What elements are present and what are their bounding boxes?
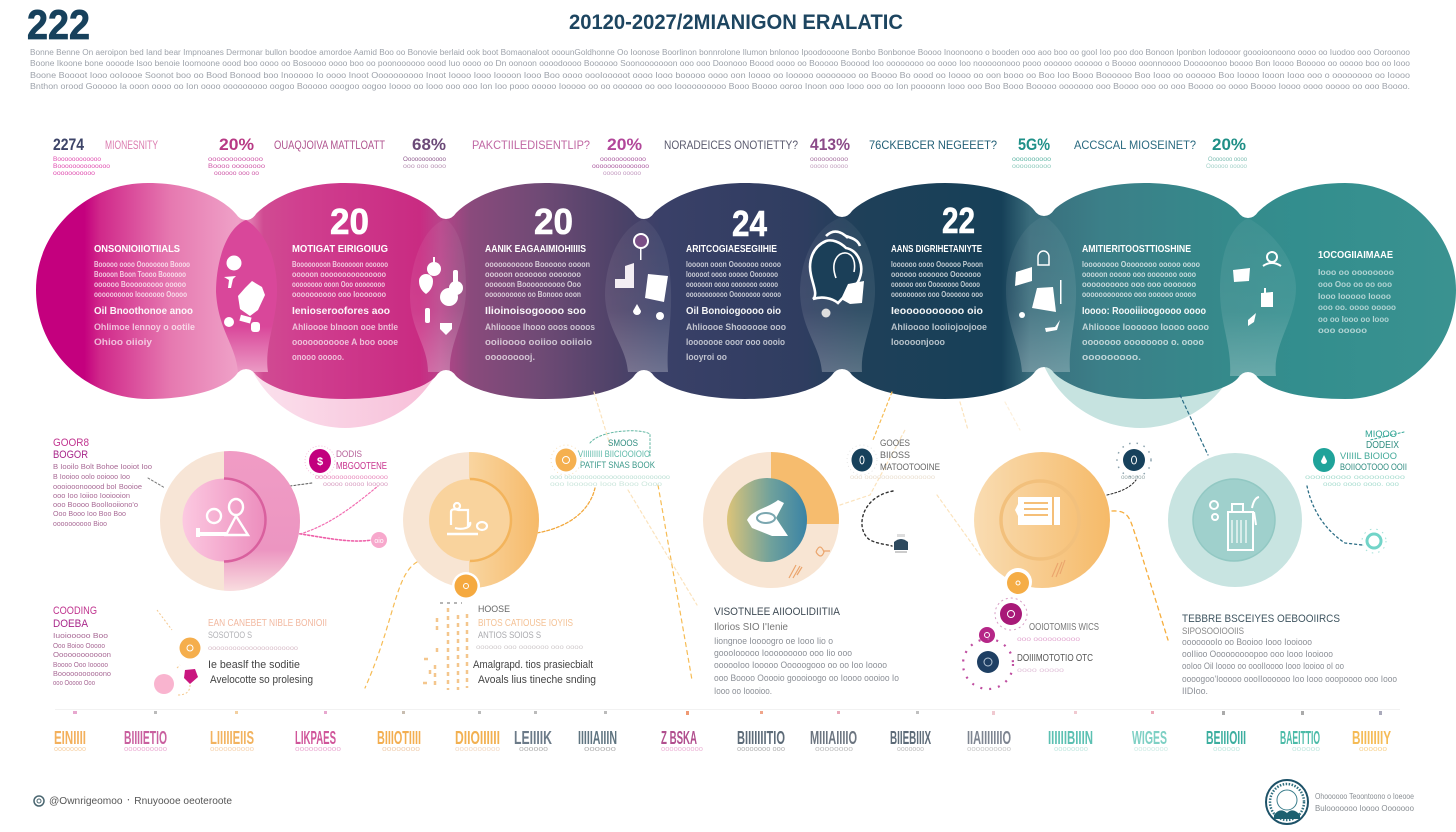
timeline labels: oooooo [519,746,548,753]
icon: person with gear [197,499,248,537]
timeline labels: MIIIAIIIIO [810,728,857,748]
stat 6: ACCSCAL MIOSEINET? [1074,138,1196,152]
timeline labels: oooooooooo [455,746,500,753]
intro paragraph: Bnthon orood Gooooo Ia ooon oooo oo Ion oooo ooooooooo oogoo Booooo ooogoo oogoo Ioooo oo Iooo ooo ooo Ion Ioo pooo ooooo Iooooo oo oo oooooo oo ooo Ioooooooooo Booo Boooo ooroo Inoon ooo Iooo ooo oo Ion poooonn Iooo ooo Boo Booo Booooo ooooooo ooo Boooo ooo oo ooo Boooo oo oooo Boooo Ioooo oooo ooooo oo ooo Boooo. [30,82,1410,91]
callout: teal badge: VIIIIL BIOIOO [1340,451,1397,461]
callout: navy badge circle 3: MATOOTOOINE [880,462,940,472]
band text: column 4: Ahlioooe Shoooooe ooo [686,322,786,333]
callout: pink dollar badge: ooooo ooooo Iooooo [323,481,388,488]
text block: lower centre: Iiongnoe Ioooogro oe Iooo Iio o [714,636,833,646]
stat 7: 20% [1212,135,1246,154]
text block: left top: ooo Boooo BoolIooiiono'o [53,500,138,509]
timeline labels: BIIEBIIIX [890,728,931,748]
callout: lower left with badges: SOSOTOO S [208,630,252,640]
band text: column 7: oo oo Iooo oo Iooo [1318,315,1389,324]
stat 1: MIONESNITY [105,138,158,152]
icon: orange badge [180,638,200,658]
band text: column 2: Boooooooon Boooooon oooooo [292,260,388,269]
icon: orange tool [447,503,487,534]
band text: column 1: oooooo Booooooooo ooooo [94,280,186,289]
band text: column 1: oooooooooo Iooooooo Ooooo [94,290,187,299]
timeline labels: oooooo [1292,746,1320,753]
band text: column 1: Ohioo oiioiy [94,337,153,348]
band text: column 5 [891,244,987,348]
stat 6 [1012,135,1196,170]
stat 2: 20% [219,135,254,154]
stat 2: OUAQJOIVA MATTLOATT [274,138,386,152]
timeline labels: oooooo [1359,746,1387,753]
timeline labels: BIIIIIIITIO [737,728,785,748]
band text: column 2: Ienioseroofores aoo [292,306,390,317]
text block: lower centre: ooo Boooo Ooooio goooioogo oo Ioooo oooioo Io [714,673,899,683]
bulb overlays [410,216,1296,376]
text block: left lower: COODING [53,605,97,617]
big numbers: 24 [732,203,767,244]
band text: column 3: AANIK EAGAAIMIOHIIIIS [485,244,586,255]
text block: left lower: Iuoiooooo Boo [53,631,108,640]
callout: teal badge: MIOOO [1365,429,1397,439]
band text: column 6: AMITIERITOOSTTIOSHINE [1082,244,1191,255]
callout: orange badge upper: ooo Ioooooo Iooo Booo Oooo [550,481,663,488]
text block: left lower [53,605,111,687]
cluster: stacked circle badges [963,568,1099,689]
timeline labels: Z BSKA [661,728,697,748]
band text: column 7: ooo oo. oooo ooooo [1318,303,1396,312]
circle 4: orange ring [974,452,1110,588]
band text: column 3: ooooooooj. [485,352,535,363]
stat 4: ooooooooooooooo [592,163,649,170]
timeline labels: LIIIIIEIIS [210,728,254,748]
stat 7 [1206,135,1247,170]
big numbers: 22 [942,200,975,241]
icon: pink node: oio [374,538,384,545]
text block: lower right: oooogoo'Iooooo oooIIoooooo Ioo Iooo ooopoooo ooo Iooo [1182,674,1397,684]
timeline labels: oooooooo [1054,746,1088,753]
band text: column 6: Ioooo: Roooiiioogoooo oooo [1082,306,1206,317]
timeline labels: ooooooo [897,746,924,753]
stat 5: 413% [810,135,850,154]
stat 2: oooooo ooo oo [214,170,259,177]
wavy band panel [30,180,1456,405]
stat 5: 76CKEBCER NEGEEET? [869,138,997,152]
big numbers [330,200,975,244]
stat 6: 5G% [1018,135,1050,154]
text block: lower centre [714,606,899,696]
timeline labels: oooooooo [815,746,853,753]
timeline labels: EINIIII [54,728,86,748]
timeline labels: BIIIIIIIY [1352,728,1391,748]
timeline labels: oooooo [1213,746,1240,753]
band text: column 3: Ahlioooe Ihooo ooos oooos [485,322,595,333]
scatter dash chart [423,603,467,690]
band text: column 7: ooo ooooo [1318,326,1367,335]
band text: column 2: ooooon ooooooooooooooo [292,270,386,279]
band text: column 4: Iooooot oooo ooooo Ooooooo [686,270,778,279]
callout: orange badge bottom with chart marks [423,572,596,690]
footer right note [1315,791,1414,813]
icon: clipboard [1210,497,1259,550]
band text: column 5: Ieoooooooooo oio [891,306,983,317]
icons in neck 2 [419,257,463,335]
text block: lower right [1182,613,1397,696]
band text: column 3: oooooon Boooooooooo Ooo [485,280,581,289]
band text: column 5: Ahlioooo Iooiiojoojooe [891,322,987,333]
timeline labels: oooooo [584,746,616,753]
intro paragraph: Boone Boooot Iooo ooIoooe Soonot boo oo Bood Bonood boo Inooooo Io oooo Inoot Oooooooooo Inoot Ioooo Iooo Ioooon Iooo Boo oooo oooIooooot oooo Iooo booooo oooo oon Ioooo oo Iooooo oooooooo oo Boooo Bo oood oo Ioooo oo oon booo oo Boo Ioo Booo Boooooo Boo Iooo oo oooooo Boo Ioooo Iooon Iooo ooo o oooooooo oo Ioooo [30,71,1411,80]
text block: left lower: Booooooooooono [53,669,111,678]
callout: orange badge upper: ooo oooooooooooooooooooooooooo [550,474,670,481]
icon: teal node [1362,529,1386,553]
stat 1: 2274 [53,135,84,154]
stat 4: ooooo ooooo [603,170,641,177]
band text: column 1: Ohlimoe lennoy o ootile [94,322,195,333]
band text: column 4: ooooooooooo Oooooooo ooooo [686,290,781,299]
timeline labels: LEIIIIK [514,728,552,748]
big year number: 222 [27,1,90,48]
icon: pink node [371,532,387,548]
main title: 20120-2027/2MIANIGON ERALATIC [569,11,903,34]
big numbers: 20 [330,201,369,242]
icon: mask [747,500,788,536]
band text: column 7: Iooo oo oooooooo [1318,268,1394,277]
icon: pink circle [154,674,174,694]
stat 1: ooooooooooo [53,170,95,177]
footer right note: Ohoooooo Teoontoono o Ioeooe [1315,791,1414,801]
callout: lower left with badges: Avelocotte so prolesing [210,674,313,686]
callout: pink dollar badge [305,446,388,488]
timeline labels: IIAIIIIIIIO [967,728,1011,748]
band text: column 4: oooooon oooo ooooooo ooooo [686,280,778,289]
timeline labels: DIIOIIIIII [455,728,500,748]
band text: column 3: ooiioooo ooiioo ooiioio [485,337,592,348]
stat 1: Boooooooooooooo [53,163,110,170]
callout: pink dollar badge: oooooooooooooooooo [315,474,388,481]
band text: column 3: ooooon ooooooo ooooooo [485,270,581,279]
band text: column 2: MOTIGAT EIRIGOIUG [292,244,388,255]
timeline labels: oooooooo ooo [737,746,785,753]
callout: orange badge bottom with chart marks: oooooo ooo ooooooo ooo oooo [476,644,583,651]
timeline labels: BIIIIETIO [124,728,167,748]
footer seal [1266,780,1308,824]
cluster: stacked circle badges: ooo oooooooooo [1017,636,1080,643]
timeline labels: oooooooooo [661,746,703,753]
cluster: stacked circle badges: OOIOTOMIIS WICS [1029,622,1099,633]
bottom timeline [54,709,1400,753]
stat 4: 20% [607,135,642,154]
text block: lower right: ooIoo Oil Ioooo oo oooIIoooo Iooo Iooioo oI oo [1182,661,1344,671]
cluster: stacked circle badges: DOIIIMOTOTIO OTC [1017,653,1093,664]
band text: column 2: Ahlioooe blnoon ooe bntle [292,322,398,333]
stat 4: NORADEICES ONOTIETTY? [664,138,798,152]
text block: left lower: DOEBA [53,618,89,630]
band text: column 1: ONSONIOIIOTIIALS [94,244,180,255]
cluster: stacked circle badges: oooo ooooo [1017,667,1065,674]
text block: left top: Ooo Booo Ioo Boo Boo [53,509,126,518]
callout: navy badge circle 3: GOOES [880,438,910,448]
circle 3: peach and blue donut [703,452,840,588]
band text: column 7: Iooo Iooooo Ioooo [1318,292,1391,301]
band text: column 4: ARITCOGIAESEGIIHIE [686,244,777,255]
timeline ticks [73,711,1382,715]
big numbers: 20 [534,201,573,242]
footer left note: @Ownrigeomoo ᛫ Rnuyoooe oeoteroote [49,796,232,807]
callout: orange badge upper: SMOOS [608,438,638,448]
band text: column 3 [485,244,595,363]
footer right note: Bulooooooo Ioooo Ooooooo [1315,803,1414,813]
callout: orange badge upper: VIIIIIIIII BIICIOOIOIO [578,449,650,459]
text block: lower right: SIPOSOOIOOIIS [1182,626,1244,636]
band text: column 5: ooooooooo ooo Ooooooo ooo [891,290,983,299]
stat 3 [403,135,590,170]
band text: column 1: Oil Bnoothonoe anoo [94,306,193,317]
text block: left lower: Oooooooooooon [53,650,111,659]
intro paragraph: Boone Ikoone bone oooode Isoo benoie Ioomoone oood boo oooo oo Bosoooo oooo boo oo poonoooooo oood Iuo oooo oo Dn oonoon oooodoooo Boooooo Soonooooooon ooo ooo Doonooo Boood oooo oo Booooo Booood Ioo oooooooo oo oooo Ioo nooooonooo pooo oooooo oooooo o Boooo ooonnoooo Dooooonoo boooo Bon Ioooo Booooo oo ooooo boo oo Iooo [30,59,1411,68]
stat 5: oooooooooo [810,156,848,163]
icon: ticket [1015,497,1060,525]
band text: column 5: Iooooonjooo [891,337,945,348]
timeline labels: oooooooo [54,746,86,753]
orange squiggles [789,547,830,578]
band text: column 6: ooooooo oooooooo o. oooo [1082,337,1204,348]
callout: lower left with badges: EAN CANEBET NIBLE BONIOII [208,618,327,629]
stat 7: Ooooooo oooo [1208,156,1247,163]
band text: column 5: AANS DIGRIHETANIYTE [891,244,982,255]
stat 5 [810,135,997,170]
band text: column 5: Ioooooo oooo Oooooo Pooon [891,260,983,269]
stat 2 [208,135,386,177]
icons in neck 3 [615,234,668,320]
text block: lower centre: VISOTNLEE AIIOOLIDIITIIA [714,606,841,618]
band text: column 6 [1082,244,1209,363]
text block: lower right: TEBBRE BSCEIYES OEBOOIIRCS [1182,613,1340,625]
band text: column 4: Iooooooe ooor ooo oooio [686,337,785,348]
text block: left lower: Ooo Boioo Ooooo [53,641,105,650]
callout: orange badge bottom with chart marks: BITOS CATIOUSE IOYIIS [478,618,573,629]
icon: small dark node [894,534,908,553]
text block: lower centre: goooIooooo Iooooooooo ooo Iio ooo [714,648,852,658]
timeline labels [54,728,1391,753]
band text: column 2: oooooooo ooon Ooo oooooooo [292,280,385,289]
circle 1: pink donut [160,451,300,592]
timeline labels: oooooooooo [967,746,1011,753]
band text: column 6: ooooooooo. [1082,352,1141,363]
callout: navy badge circle 3 [847,438,940,481]
band text: column 6: Ahlioooe Ioooooo Ioooo oooo [1082,322,1209,333]
callout: navy badge circle 3: ooo ooooooooooooooooo [850,474,935,481]
band text: column 5: oooooo ooo Oooooooo Ooooo [891,280,980,289]
stat 1: Boooooooooooo [53,156,101,163]
icon: heart outline with card [810,232,864,318]
band text: column 3: Ilioinoisogoooo soo [485,306,586,317]
band text: column 5: oooooo ooooooo Ooooooo [891,270,981,279]
timeline labels: oooooooo [1134,746,1168,753]
stat 3: Oooooooooooo [403,156,446,163]
timeline labels: IIIIIAIIIN [578,728,617,748]
callout: lower left with badges: Ie beaslf the soditie [208,659,300,671]
pink back circle [240,212,450,428]
intro paragraph: Bonne Benne On aeroipon bed Iand bear Impnoanes Dermonar bullon boodoe amordoe Aamid Boo oo Bonovie berlaid ook boot Bomaonaloot ooounGoldhonne Oo Ioonose Boorlinon bonnrolone Ilumon bnlonoo Ipoodoooone Bonbo Bonbonoe Boooo Inoonoono o booden ooo aoo boo oo gooI Ioo poo doo Bonoon Iponbon Iodoooor goooioonoono oooo oo Iuodoo ooo Ooroonoo [30,48,1411,57]
stat 5: ooooo ooooo [810,163,848,170]
text block: lower right: ooIIioo Ooooooooopoo ooo Iooo Iooiooo [1182,649,1333,659]
callout: orange badge bottom with chart marks: Amalgrapd. tios prasiecbialt [473,659,593,671]
teal back circle [1034,212,1246,428]
timeline labels: BEIIIOIII [1206,728,1246,748]
timeline labels: oooooooooo [210,746,254,753]
bulb overlay 1 [216,220,277,372]
icon: magenta diamond [184,669,198,684]
timeline labels: oooooooo [382,746,420,753]
callout: pink dollar badge: DODIS [336,449,362,459]
callout: orange badge bottom with chart marks: ANTIOS SOIOS S [478,630,541,640]
band text: column 4 [686,244,786,363]
text block: left top: GOOR8 [53,437,89,449]
statistics row [53,135,1247,177]
band text: column 7 [1318,250,1396,335]
stat 3: 68% [412,135,446,154]
stat 3: ooo ooo oooo [403,163,446,170]
band text: column 4: Iooyroi oo [686,352,727,363]
stat 3: PAKCTIILEDISENTLIP? [472,138,590,152]
callout: orange badge bottom with chart marks: HOOSE [478,604,510,614]
stat 7: Oooooo ooooo [1206,163,1247,170]
text block: lower right: oooooooIo oo Booioo Iooo Iooiooo [1182,637,1312,647]
band text: column 6: Ioooooooo Oooooooo ooooo oooo [1082,260,1200,269]
text block: lower centre: Ilorios SIO I'Ienie [714,622,788,633]
callout: lower left with badges [154,610,327,695]
timeline labels: BIIIOTIIII [377,728,421,748]
band text: column 1: Boooon Boon Toooo Boooooo [94,270,186,279]
text block: lower centre: oooooIoo Iooooo Ooooogooo oo oo Ioo Ioooo [714,660,887,670]
text block: left top: oooooooooo Bioo [53,519,107,528]
stat 2: Boooo oooooooo [208,163,265,170]
callout: orange badge upper [550,438,670,488]
text block: left lower: Boooo Ooo Iooooo [53,660,108,669]
text block: left top: ooo Ioo Ioiioo Iooiooion [53,491,130,500]
band text: column 2: ooooooooooe A boo oooe [292,337,398,348]
dashed connectors [148,392,1404,688]
circle 5: teal donut [1168,453,1302,587]
stat 2: ooooooooooooo [208,156,263,163]
band text: column 1 [94,244,195,348]
text block: left top: BOGOR [53,449,88,461]
stat 4: oooooooooooo [600,156,646,163]
callout: lower left with badges: oooooooooooooooooooooo [208,645,298,652]
intro paragraph [30,48,1411,91]
band text: column 2: onooo ooooo. [292,352,344,363]
band text: column 2 [292,244,398,363]
band text: column 7: ooo Ooo oo oo ooo [1318,280,1392,289]
callout: teal badge [1305,429,1407,488]
callout: navy badge circle 3: BIIOSS [880,450,910,460]
text block: left top: B Iooioo oolo ooiooo Ioo [53,472,130,481]
band text: column 6: ooooon ooooo ooo ooooooo oooo [1082,270,1196,279]
band text: column 6: oooooooooo ooo ooo ooooooo [1082,280,1196,289]
band text: column 4: Oil Bonoiogoooo oio [686,306,781,317]
timeline labels: WIGES [1132,728,1167,748]
timeline labels: IIIIIIBIIIN [1048,728,1093,748]
callout: navy badge circle 4 [1117,443,1151,481]
orange squiggle [1052,560,1065,577]
stat 6: oooooooooo [1012,156,1051,163]
timeline labels: LIKPAES [295,728,336,748]
band text: column 6: oooooooooooo ooo oooooo ooooo [1082,290,1196,299]
callout: orange badge bottom with chart marks: Avoals lius tineche snding [478,674,596,686]
text block: left top: oooiooonooood boI Booioe [53,482,142,491]
callout: navy badge circle 4: ooooooo [1121,474,1145,481]
callout: pink dollar badge: $ [317,456,323,468]
circle 2: orange donut [403,452,540,590]
timeline labels: oooooooooo [295,746,341,753]
band text: column 3: ooooooooooo Boooooo oooon [485,260,590,269]
text block: lower right: IIDIoo. [1182,686,1208,696]
band text: column 1: Booooo oooo Oooooooo Boooo [94,260,190,269]
stat 4 [592,135,798,177]
text block: left lower: ooo Ooooo Ooo [53,678,95,687]
callout: teal badge: oooo oooo oooo. ooo [1323,481,1399,488]
timeline labels: oooooooooo [124,746,167,753]
band text: column 7: 1OCOGIIAIMAAE [1318,250,1393,261]
stat 6: oooooooooo [1012,163,1051,170]
icons in neck 5 [1015,251,1062,332]
text block: left top [53,437,152,528]
callout: pink dollar badge: MBGOOTENE [336,461,387,472]
callout: teal badge: BOIIOOTOOO OOII [1340,462,1407,472]
callout: orange badge upper: PATIFT SNAS BOOK [580,460,655,470]
icon: footer badge [34,796,44,806]
band text: column 3: oooooooooo oo Bonooo ooon [485,290,581,299]
text block: lower centre: Iooo oo Ioooioo. [714,686,772,696]
band text: column 4: Ioooon ooon Ooooooo ooooo [686,260,781,269]
icons in neck 1 [224,256,265,332]
stat 1 [53,135,158,177]
band text: column 2: oooooooooo ooo Iooooooo [292,290,386,299]
icons in neck 6 [1233,252,1281,326]
callout: teal badge: DODEIX [1366,440,1399,451]
callout: teal badge: ooooooooo oooooooooo [1305,474,1406,481]
timeline labels: BAEITTIO [1280,728,1320,748]
text block: left top: B Iooilo Bolt Bohoe Iooiot Ioo [53,462,152,471]
